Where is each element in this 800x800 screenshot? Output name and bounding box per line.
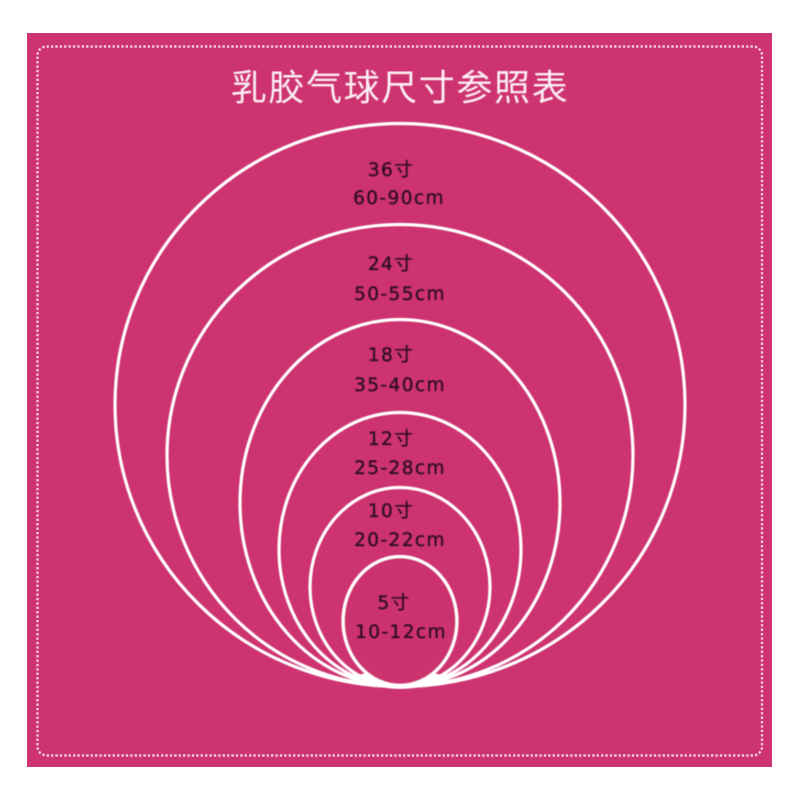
label: 24 inch: 24寸 (368, 254, 414, 275)
label: 18 inch (354, 345, 446, 396)
label: 18 inch: 18寸 (368, 345, 414, 366)
outline: 36 inch (115, 124, 685, 686)
outline: 5 inch (343, 556, 457, 686)
outline: 24 inch (167, 224, 633, 686)
label: 24 inch: 50-55cm (354, 284, 446, 305)
balloon size outlines (115, 124, 685, 689)
title: 乳胶气球尺寸参照表 (231, 59, 569, 111)
label: 36 inch: 60-90cm (353, 188, 445, 209)
label: 36 inch: 36寸 (368, 160, 414, 181)
label: 10 inch: 10寸 (368, 501, 414, 522)
label: 18 inch: 35-40cm (354, 375, 446, 396)
label: 12 inch: 12寸 (368, 429, 414, 450)
label: 5 inch (355, 593, 447, 643)
label: 12 inch (354, 429, 446, 479)
label: 10 inch (354, 501, 446, 551)
outline: 12 inch (279, 412, 521, 686)
label: 12 inch: 25-28cm (354, 458, 446, 479)
outline: 10 inch (310, 488, 490, 686)
label: 5 inch: 10-12cm (355, 622, 447, 643)
label: 5 inch: 5寸 (377, 593, 411, 614)
label: 36 inch (353, 160, 445, 209)
outline: 18 inch (240, 320, 560, 686)
label: 10 inch: 20-22cm (354, 530, 446, 551)
junction where the outlines merge (348, 670, 452, 689)
label: 24 inch (354, 254, 446, 305)
